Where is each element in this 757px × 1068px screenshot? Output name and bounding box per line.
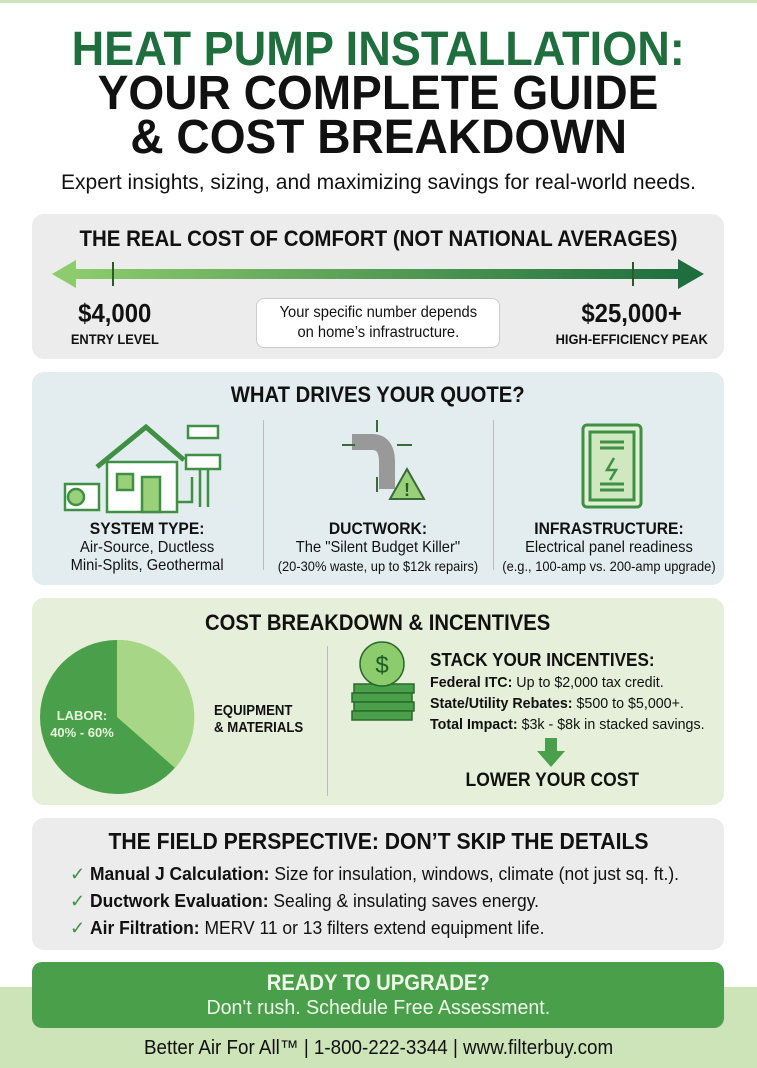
checklist: ✓ — [70, 864, 85, 884]
high value: HIGH-EFFICIENCY PEAK — [556, 331, 708, 347]
high value: $25,000+ — [582, 298, 682, 328]
arrow: cost range — [52, 259, 704, 289]
title: HEAT PUMP INSTALLATION: — [72, 23, 685, 76]
incentives text: State/Utility Rebates: $500 to $5,000+. — [430, 695, 684, 712]
lower cost label: LOWER YOUR COST — [465, 770, 639, 791]
incentives text: STACK YOUR INCENTIVES: — [430, 650, 655, 670]
label: ductwork: The "Silent Budget Killer" — [296, 539, 460, 556]
footer: Better Air For All™ | 1-800-222-3344 | www.filterbuy.com — [144, 1037, 613, 1059]
pie label: equipment: EQUIPMENT — [214, 702, 292, 719]
incentives text — [430, 650, 705, 733]
label: ductwork — [278, 519, 478, 574]
icon: money stack: $ — [375, 652, 389, 679]
incentives text: Total Impact: $3k - $8k in stacked savings. — [430, 716, 705, 733]
callout — [256, 298, 500, 348]
label: infrastructure: (e.g., 100-amp vs. 200-amp upgrade) — [502, 558, 716, 574]
title: YOUR COMPLETE GUIDE — [98, 67, 659, 120]
icon: ductwork: ! — [404, 480, 410, 500]
checklist: ✓ — [70, 891, 85, 911]
icon: money stack — [351, 641, 415, 721]
pie label: equipment: & MATERIALS — [214, 719, 303, 736]
heading: WHAT DRIVES YOUR QUOTE? — [231, 382, 525, 407]
pie chart: 40% - 60% — [50, 725, 114, 740]
callout: Your specific number depends — [279, 304, 477, 321]
checklist: Ductwork Evaluation: Sealing & insulating saves energy. — [90, 891, 539, 911]
low value: ENTRY LEVEL — [71, 331, 159, 347]
label: ductwork: (20-30% waste, up to $12k repairs) — [278, 558, 478, 574]
pie chart — [40, 640, 194, 794]
label: ductwork: DUCTWORK: — [329, 519, 427, 538]
label: infrastructure — [502, 519, 716, 574]
label: system type: Mini-Splits, Geothermal — [71, 557, 224, 574]
checklist — [70, 864, 679, 938]
arrow: down — [537, 738, 565, 767]
panel: cost breakdown — [32, 598, 724, 805]
CTA button — [32, 962, 724, 1028]
callout: on home’s infrastructure. — [297, 324, 459, 341]
icon: ductwork — [342, 420, 426, 500]
subtitle: Expert insights, sizing, and maximizing savings for real-world needs. — [61, 171, 696, 194]
checklist: ✓ — [70, 918, 85, 938]
label: infrastructure: Electrical panel readiness — [525, 539, 693, 556]
title — [72, 23, 685, 164]
icon: electrical panel — [582, 424, 642, 508]
checklist: Air Filtration: MERV 11 or 13 filters extend equipment life. — [90, 918, 545, 938]
heading: THE FIELD PERSPECTIVE: DON’T SKIP THE DETAILS — [108, 828, 648, 854]
label: system type: Air-Source, Ductless — [80, 539, 215, 556]
label: infrastructure: INFRASTRUCTURE: — [534, 519, 684, 538]
incentives text: Federal ITC: Up to $2,000 tax credit. — [430, 674, 664, 691]
pie chart: LABOR: — [57, 708, 107, 723]
label: system type: SYSTEM TYPE: — [90, 519, 205, 538]
checklist: Manual J Calculation: Size for insulation, windows, climate (not just sq. ft.). — [90, 864, 679, 884]
icon: house with heat pump — [64, 424, 222, 514]
low value: $4,000 — [78, 298, 152, 328]
title: & COST BREAKDOWN — [130, 111, 627, 164]
CTA button: Don't rush. Schedule Free Assessment. — [206, 997, 550, 1019]
CTA button: READY TO UPGRADE? — [266, 970, 490, 995]
pie label: equipment — [214, 702, 303, 736]
low value — [71, 298, 159, 347]
panel: real cost — [32, 214, 724, 359]
high value — [556, 298, 708, 347]
heading: COST BREAKDOWN & INCENTIVES — [205, 610, 551, 635]
panel: field perspective — [32, 818, 724, 950]
label: system type — [71, 519, 224, 574]
panel: what drives your quote — [32, 372, 724, 585]
heading: THE REAL COST OF COMFORT (NOT NATIONAL AVERAGES) — [79, 226, 677, 251]
